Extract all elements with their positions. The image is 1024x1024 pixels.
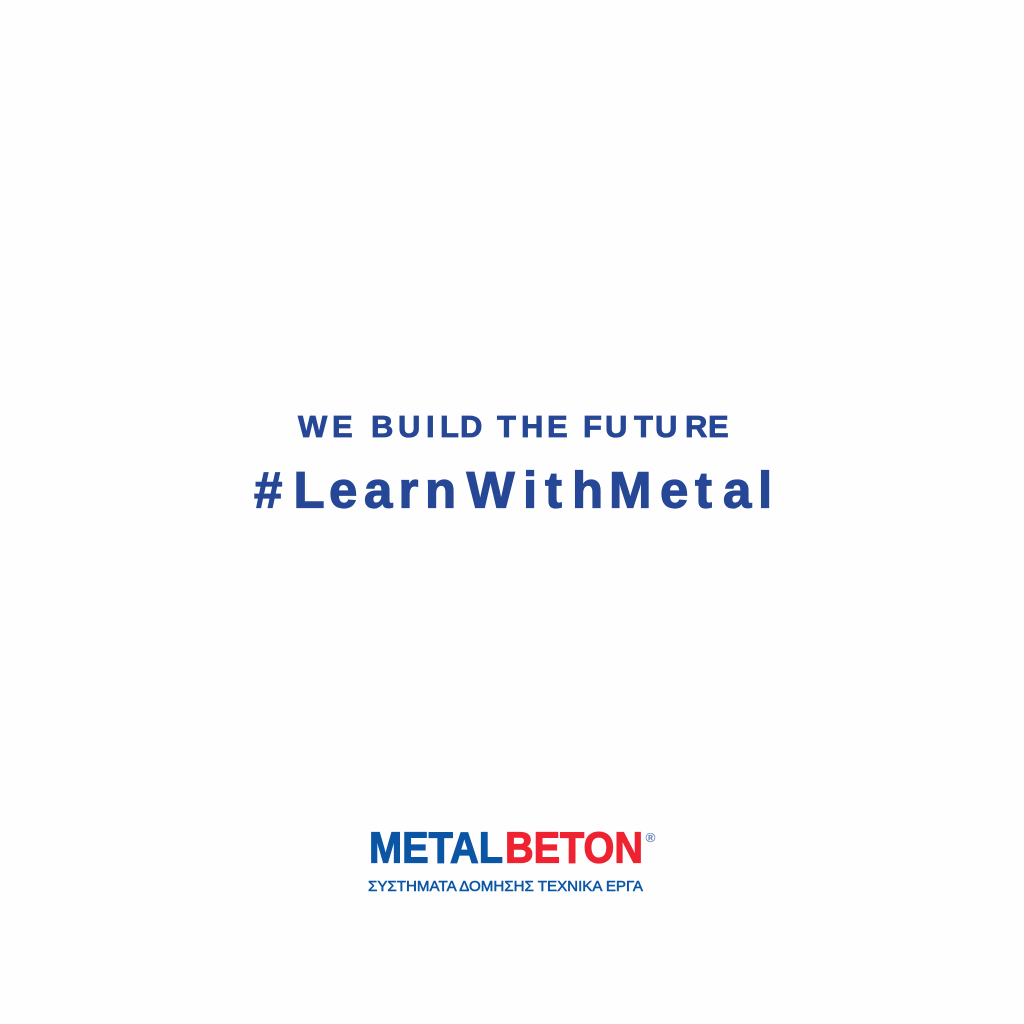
logo word: beton: BETON [505,824,643,873]
hashtag heading: #LearnWithMetal [254,462,772,518]
registered mark: ® [646,830,656,845]
logo word: metal: METAL [369,824,503,873]
logo: metalbeton [368,824,656,895]
tagline: we build the future: WE BUILD THE FUTURE [298,409,729,444]
logo subtitle: ΣΥΣΤΗΜΑΤΑ ΔΟΜΗΣΗΣ ΤΕΧΝΙΚΑ ΕΡΓΑ [368,879,643,895]
